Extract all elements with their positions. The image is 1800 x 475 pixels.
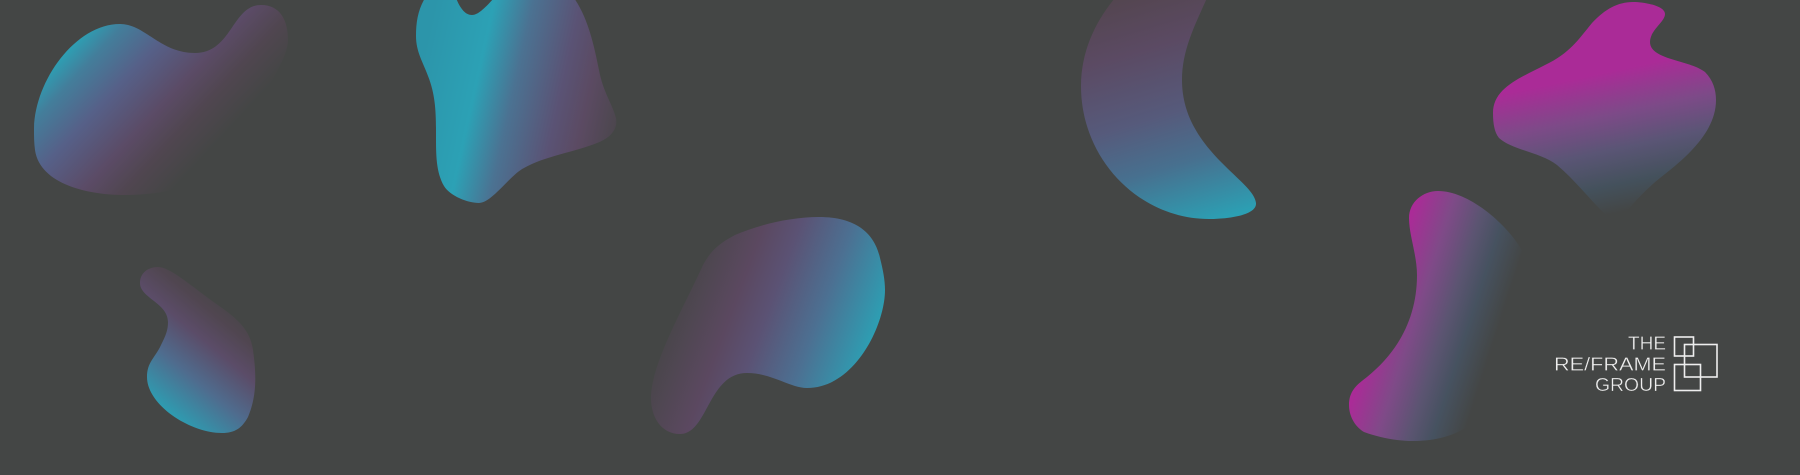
blob: centre [651,217,885,434]
blob: magenta top-right [1493,2,1716,217]
blob: small lower-left [140,267,255,433]
logo mark: overlapping squares [1674,337,1717,390]
logo: The Re/Frame Group [1554,334,1717,395]
logo wordmark: GROUP [1595,375,1666,395]
blob: top-left teal to plum [34,5,288,195]
blob: top teal with notch [416,0,616,203]
logo wordmark: RE/FRAME [1554,355,1666,375]
blob: top crescent [1081,0,1256,219]
blob: magenta lower-right [1349,191,1522,441]
logo wordmark: THE [1628,334,1666,354]
logo wordmark [1554,334,1666,395]
